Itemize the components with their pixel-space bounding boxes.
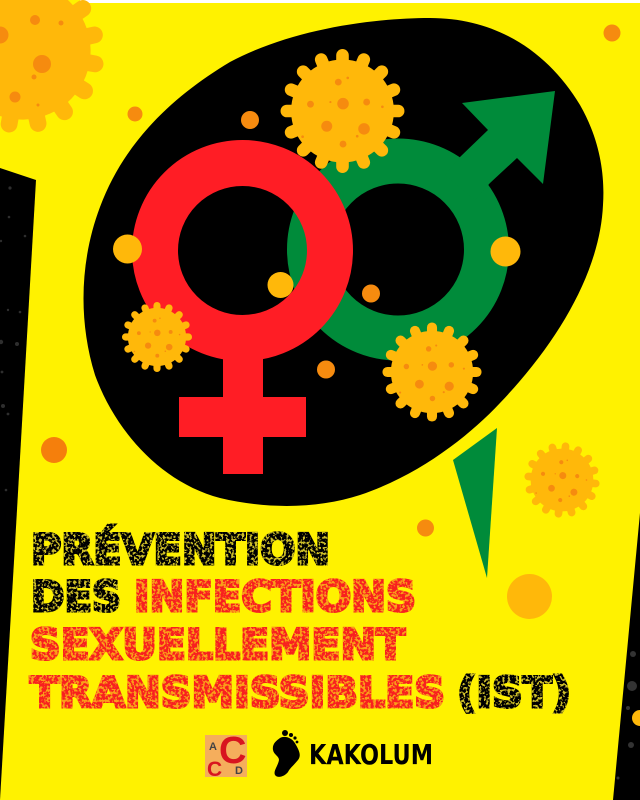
title word: INFECTIONS: INFECTIONS — [134, 572, 416, 621]
logo: ACCD: C — [219, 730, 246, 772]
female symbol — [155, 163, 330, 474]
dot: right edge — [632, 710, 640, 726]
title word: DES: DES — [31, 572, 121, 621]
title word: (IST): (IST) — [457, 668, 571, 717]
speech bubble tail: green triangle — [453, 428, 497, 578]
wordmark: KAKOLUM — [309, 738, 433, 771]
logo: ACCD: D — [235, 765, 243, 777]
logo: ACCD: C — [207, 758, 222, 781]
logo: ACCD: A — [209, 741, 217, 753]
virus: lower left — [126, 306, 188, 368]
title line: TRANSMISSIBLES: TRANSMISSIBLES — [30, 668, 445, 717]
left black panel — [0, 168, 36, 800]
logo: ACCD — [205, 730, 247, 781]
speech bubble: black blob — [84, 18, 603, 506]
decorative orange and amber dots — [41, 24, 620, 619]
virus: top left — [0, 0, 108, 137]
logo: KAKOLUM — [273, 730, 433, 777]
title — [30, 524, 571, 717]
male symbol — [310, 91, 555, 338]
virus: lower right — [387, 327, 477, 417]
virus: top centre — [287, 55, 398, 167]
top white strip — [80, 0, 640, 3]
icon: Africa footprint — [273, 730, 300, 777]
title line: PRÉVENTION: PRÉVENTION — [31, 524, 330, 574]
right black panel — [613, 513, 640, 800]
title line: SEXUELLEMENT: SEXUELLEMENT — [30, 620, 405, 669]
virus: right of tail — [525, 443, 599, 517]
